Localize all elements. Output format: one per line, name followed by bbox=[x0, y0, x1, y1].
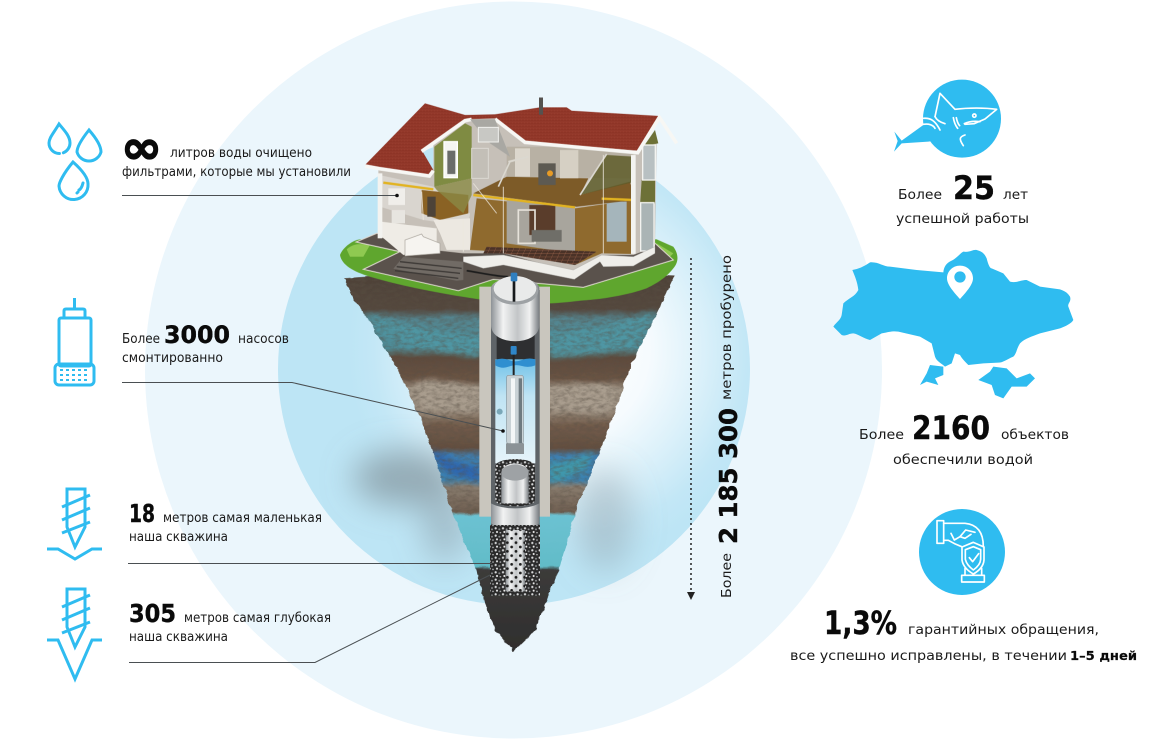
glass stair lines bbox=[422, 155, 603, 253]
text: objects supplied: объектов bbox=[1001, 428, 1069, 443]
text: liters purified: литров воды очищено bbox=[170, 146, 312, 161]
background circle: outer bbox=[145, 2, 882, 738]
ground floor interior bbox=[470, 198, 633, 265]
icon: map pin bbox=[947, 266, 973, 299]
windows bbox=[444, 142, 457, 178]
concrete casing bbox=[479, 287, 550, 517]
text: years of work bbox=[896, 169, 1029, 227]
text: warranty claims: гарантийных обращения, bbox=[908, 623, 1099, 638]
text: objects supplied: Более bbox=[859, 428, 904, 443]
white foundation bbox=[463, 247, 655, 279]
heading group: pumps stat bbox=[55, 298, 289, 385]
number: 18: 18 bbox=[129, 499, 155, 528]
steel pipe body bbox=[491, 290, 540, 530]
icon: short drill bbox=[47, 489, 102, 559]
vertical stat: total meters drilled: Более bbox=[720, 553, 735, 598]
text: meters deepest: метров самая глубокая bbox=[184, 611, 331, 626]
text: warranty claims: 1,3% bbox=[824, 604, 897, 642]
background circle: inner glow bbox=[278, 133, 750, 605]
perforated filter pipe bbox=[490, 525, 540, 596]
text: objects supplied: обеспечили водой bbox=[893, 453, 1033, 468]
leader dots bbox=[395, 194, 505, 433]
roof bbox=[365, 103, 659, 176]
illustration: soil layers of the cone bbox=[340, 267, 677, 653]
text: warranty claims: все успешно исправлены, в течении bbox=[790, 649, 1067, 664]
illustration: house on ground plate with grass bbox=[340, 97, 677, 304]
heading group: deepest well stat bbox=[47, 589, 331, 679]
driveway and terrace bbox=[356, 233, 673, 291]
text: warranty claims bbox=[790, 604, 1137, 664]
heading group: smallest well stat bbox=[47, 489, 322, 559]
water column bbox=[495, 359, 535, 463]
arrow: drilling depth bbox=[687, 258, 695, 600]
gable vent unit bbox=[470, 119, 510, 157]
text: mounted: смонтированно bbox=[122, 351, 223, 366]
text: our well: наша скважина bbox=[129, 630, 228, 645]
left room block bbox=[379, 175, 470, 227]
number: 3000: 3000 bbox=[164, 321, 230, 349]
text: more than: Более bbox=[122, 332, 160, 347]
text: years of work: успешной работы bbox=[896, 212, 1029, 227]
leader lines bbox=[122, 196, 503, 662]
green cladding bbox=[434, 123, 472, 187]
text: objects supplied bbox=[859, 409, 1069, 468]
text: years of work: 25 bbox=[953, 169, 995, 207]
yellow floor beams bbox=[383, 183, 635, 207]
house walls bbox=[378, 118, 657, 272]
heading group: water filters stat bbox=[49, 120, 351, 200]
number: 305: 305 bbox=[129, 599, 176, 628]
upper floor bbox=[473, 177, 635, 207]
text: pumps: насосов bbox=[238, 332, 289, 347]
text: installed filters: фильтрами, которые мы установили bbox=[122, 165, 351, 180]
underfloor grid bbox=[483, 247, 597, 265]
text: meters smallest: метров самая маленькая bbox=[163, 511, 322, 526]
lower pipe section bbox=[491, 503, 539, 531]
vertical stat: total meters drilled bbox=[714, 255, 743, 598]
submersible pump bbox=[497, 346, 524, 454]
roof edges bbox=[365, 117, 677, 176]
supply hose bbox=[467, 271, 508, 277]
text: our well: наша скважина bbox=[129, 530, 228, 545]
entrance steps bbox=[393, 257, 463, 281]
upper pipe section bbox=[491, 278, 539, 341]
icon: deep drill bbox=[47, 589, 102, 679]
illustration: well casing and pump bbox=[479, 273, 550, 596]
chimney bbox=[539, 97, 543, 115]
number: infinity: ∞ bbox=[121, 120, 162, 174]
map: Ukraine bbox=[833, 250, 1073, 398]
icon: guarantee pipe badge bbox=[919, 509, 1005, 595]
text: objects supplied: 2160 bbox=[912, 409, 990, 447]
vertical stat: total meters drilled: метров пробурено bbox=[720, 255, 735, 400]
icon: shark badge bbox=[894, 80, 1001, 158]
icon: water drops bbox=[49, 124, 101, 200]
text: warranty claims: 1–5 дней bbox=[1070, 648, 1137, 663]
text: years of work: Более bbox=[898, 188, 942, 203]
text: years of work: лет bbox=[1003, 188, 1028, 203]
vertical stat: total meters drilled: 2 185 300 bbox=[714, 408, 743, 544]
icon: submersible pump bbox=[55, 298, 94, 385]
soft shadows behind the cone bbox=[353, 450, 633, 572]
gravel filter bbox=[495, 459, 535, 506]
